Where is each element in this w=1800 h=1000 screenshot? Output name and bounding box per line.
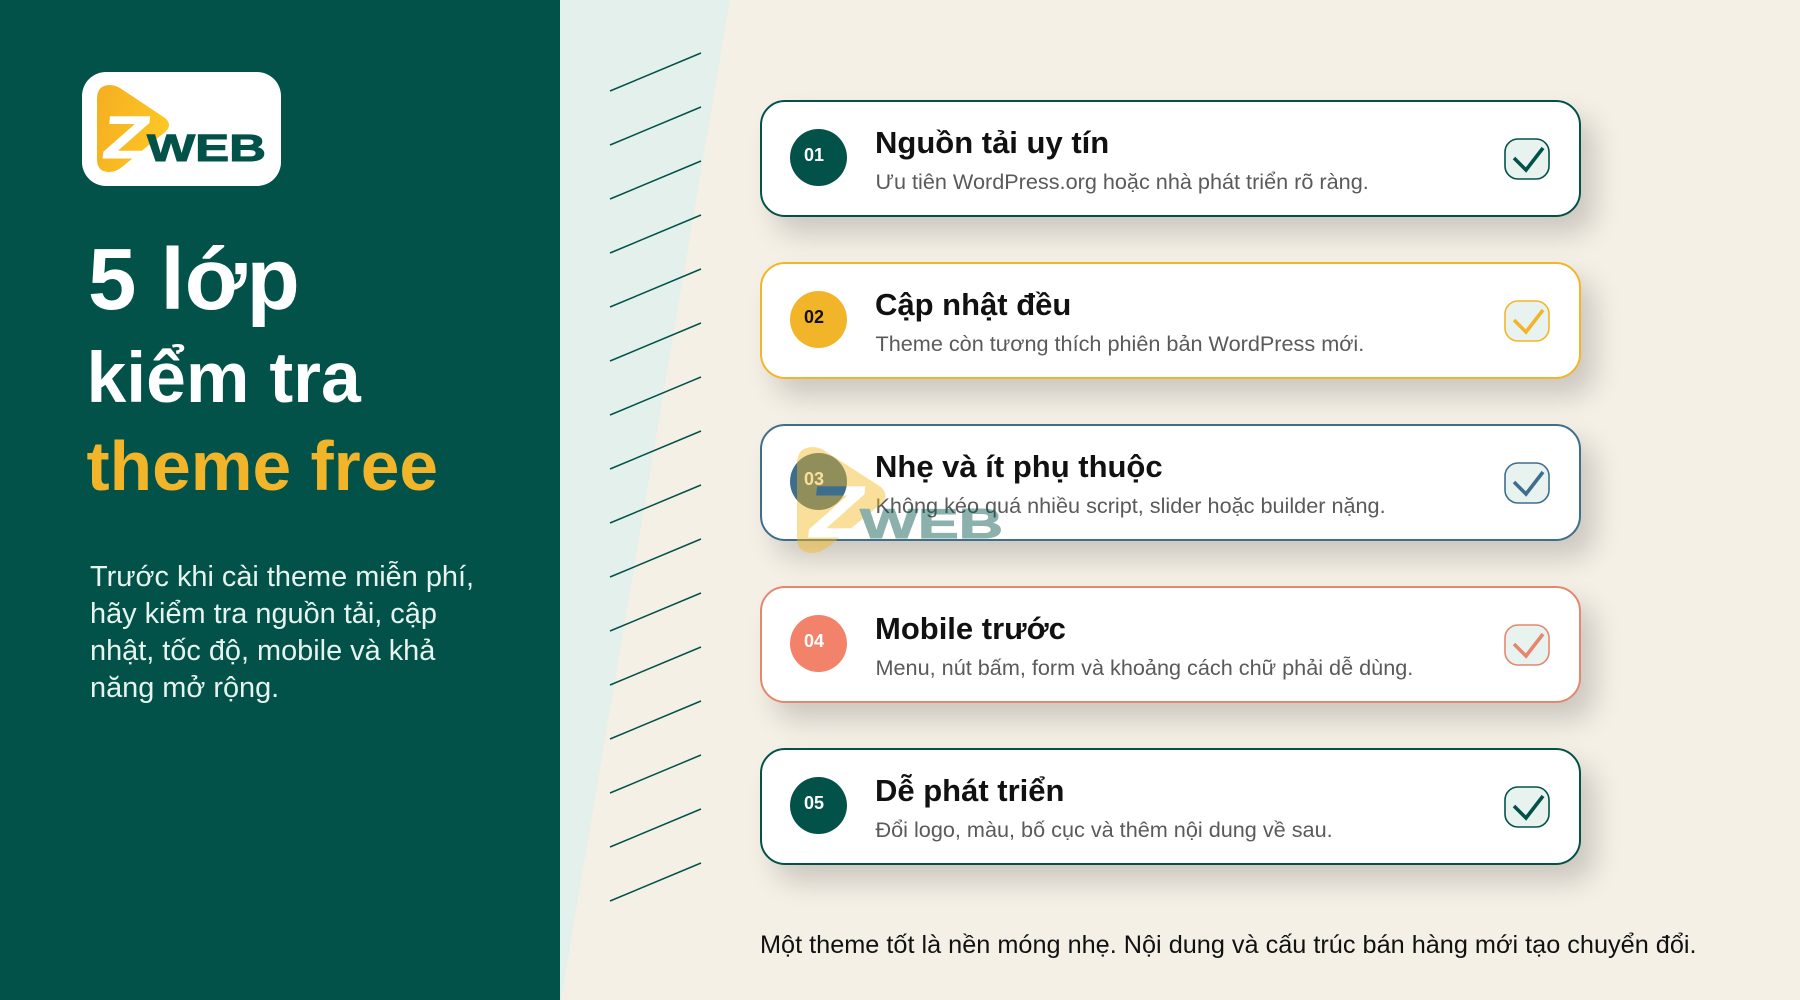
logo watermark bbox=[797, 447, 1003, 553]
diagonal line pattern bbox=[610, 52, 702, 902]
number badge bbox=[790, 129, 847, 186]
icon: check bbox=[1504, 786, 1550, 828]
card 1 bbox=[760, 100, 1581, 217]
card heading: Nguồn tải uy tín bbox=[875, 125, 1109, 160]
card heading: Mobile trước bbox=[875, 611, 1066, 646]
card text: Ưu tiên WordPress.org hoặc nhà phát triển rõ ràng. bbox=[876, 169, 1369, 194]
footer note: Một theme tốt là nền móng nhẹ. Nội dung và cấu trúc bán hàng mới tạo chuyển đổi. bbox=[760, 931, 1697, 959]
card 3 bbox=[760, 424, 1581, 541]
number badge: 05 bbox=[804, 793, 824, 813]
card text: Theme còn tương thích phiên bản WordPress mới. bbox=[876, 331, 1364, 356]
number badge bbox=[790, 777, 847, 834]
number badge bbox=[790, 291, 847, 348]
left panel bbox=[0, 0, 560, 1000]
card 4 bbox=[760, 586, 1581, 703]
card 5 bbox=[760, 748, 1581, 865]
description: Trước khi cài theme miễn phí, bbox=[90, 561, 474, 593]
icon: check bbox=[1504, 138, 1550, 180]
icon: check bbox=[1504, 624, 1550, 666]
description: năng mở rộng. bbox=[90, 672, 279, 704]
title line 2: kiểm tra bbox=[86, 338, 361, 418]
card heading: Dễ phát triển bbox=[875, 773, 1064, 808]
description: nhật, tốc độ, mobile và khả bbox=[90, 635, 435, 667]
card heading: Cập nhật đều bbox=[875, 287, 1071, 322]
icon: check bbox=[1504, 300, 1550, 342]
description bbox=[90, 561, 474, 704]
title bbox=[86, 231, 438, 505]
number badge: 03 bbox=[804, 469, 824, 489]
logo: WEB bbox=[147, 128, 266, 170]
logo watermark: WEB bbox=[860, 500, 1003, 547]
title line 1: 5 lớp bbox=[88, 231, 300, 328]
card text: Menu, nút bấm, form và khoảng cách chữ phải dễ dùng. bbox=[876, 655, 1413, 680]
card text: Không kéo quá nhiều script, slider hoặc builder nặng. bbox=[876, 493, 1386, 518]
card text: Đổi logo, màu, bố cục và thêm nội dung về sau. bbox=[876, 817, 1333, 842]
number badge bbox=[790, 453, 847, 510]
number badge: 02 bbox=[804, 307, 824, 327]
number badge: 04 bbox=[804, 631, 824, 651]
number badge: 01 bbox=[804, 145, 824, 165]
description: hãy kiểm tra nguồn tải, cập bbox=[90, 598, 437, 630]
logo bbox=[82, 72, 281, 186]
card 2 bbox=[760, 262, 1581, 379]
card heading: Nhẹ và ít phụ thuộc bbox=[875, 449, 1163, 484]
number badge bbox=[790, 615, 847, 672]
icon: check bbox=[1504, 462, 1550, 504]
title line 3: theme free bbox=[86, 427, 438, 505]
